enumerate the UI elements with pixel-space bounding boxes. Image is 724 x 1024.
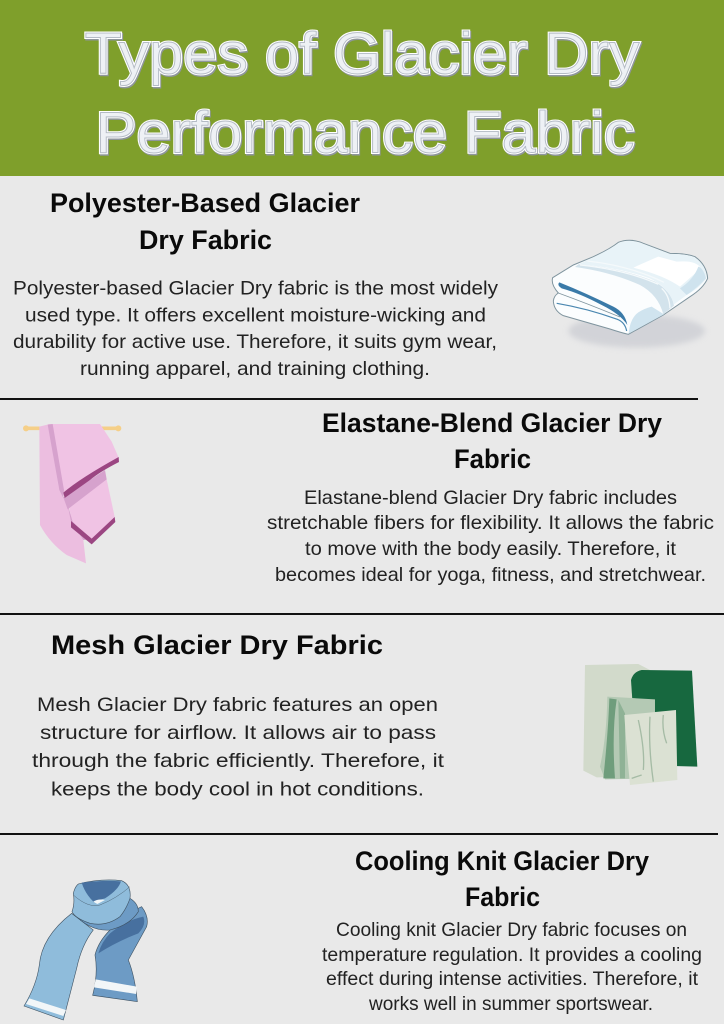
title: Types of Glacier Dry: [84, 22, 640, 86]
text: elastane-blend description: [267, 487, 714, 586]
text: elastane-blend description: becomes ideal for yoga, fitness, and stretchwear.: [275, 564, 706, 586]
title: Types of Glacier Dry: [84, 22, 640, 86]
title: Performance Fabric: [96, 100, 634, 166]
icon: blue scarf: [24, 880, 147, 1020]
text: mesh description: keeps the body cool in hot conditions.: [51, 778, 424, 800]
text: mesh description: through the fabric efficiently. Therefore, it: [32, 750, 445, 772]
title: [84, 22, 640, 167]
panel: mesh fabric: [32, 630, 697, 800]
heading: elastane-blend: Fabric: [454, 444, 531, 474]
text: mesh description: Mesh Glacier Dry fabric features an open: [37, 694, 438, 716]
heading: cooling knit: Cooling Knit Glacier Dry: [355, 846, 649, 876]
text: polyester-based description: durability for active use. Therefore, it suits gym wear,: [13, 331, 497, 353]
text: cooling knit description: [322, 919, 702, 1015]
divider line 3: [0, 833, 718, 835]
heading: polyester-based: Dry Fabric: [139, 225, 272, 255]
icon: green mesh fabric swatches: [583, 664, 697, 785]
header banner: [0, 0, 724, 176]
icon: pink towel on rod: [23, 424, 121, 563]
title: Performance Fabric: [96, 102, 636, 167]
panel: cooling knit fabric: [24, 846, 702, 1020]
text: cooling knit description: effect during intense activities. Therefore, it: [326, 968, 699, 990]
title: Performance Fabric: [96, 100, 634, 166]
heading: polyester-based: [50, 188, 360, 255]
text: cooling knit description: temperature regulation. It provides a cooling: [322, 944, 702, 966]
panel: polyester-based fabric: [13, 188, 708, 380]
heading: mesh: Mesh Glacier Dry Fabric: [51, 630, 383, 660]
heading: cooling knit: [355, 846, 649, 912]
text: cooling knit description: Cooling knit Glacier Dry fabric focuses on: [336, 919, 687, 941]
panel: elastane-blend fabric: [23, 408, 714, 586]
text: polyester-based description: used type. It offers excellent moisture-wicking and: [25, 304, 486, 326]
text: polyester-based description: [13, 278, 498, 380]
divider line 2: [0, 613, 724, 615]
divider line 1: [0, 398, 698, 400]
text: polyester-based description: running apparel, and training clothing.: [80, 358, 430, 380]
text: elastane-blend description: stretchable fibers for flexibility. It allows the fabric: [267, 512, 714, 534]
heading: cooling knit: Fabric: [465, 882, 540, 912]
text: polyester-based description: Polyester-based Glacier Dry fabric is the most widely: [13, 278, 498, 300]
icon: folded white towel: [552, 240, 708, 348]
heading: elastane-blend: [322, 408, 662, 474]
text: mesh description: [32, 694, 445, 800]
heading: polyester-based: Polyester-Based Glacier: [50, 188, 360, 218]
text: elastane-blend description: Elastane-blend Glacier Dry fabric includes: [304, 487, 677, 509]
title: Types of Glacier Dry: [86, 23, 640, 88]
text: cooling knit description: works well in summer sportswear.: [368, 993, 653, 1015]
text: mesh description: structure for airflow. It allows air to pass: [40, 722, 436, 744]
heading: elastane-blend: Elastane-Blend Glacier Dry: [322, 408, 662, 438]
text: elastane-blend description: to move with the body easily. Therefore, it: [305, 538, 677, 560]
